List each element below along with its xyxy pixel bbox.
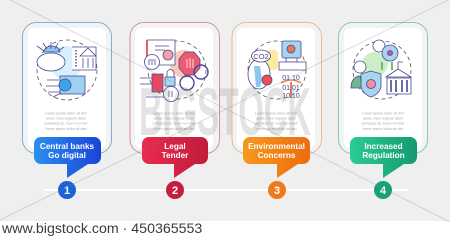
text: lorem ipsum: principes at. Cum no movi <box>153 122 195 126</box>
text: lorem ipsum: lorem ipsum dolor sit dim <box>154 127 194 131</box>
number badge 3 <box>268 181 286 199</box>
text: lorem ipsum: amet, mea regione diam <box>46 116 86 120</box>
label tab: legal tender: Tender <box>162 151 189 160</box>
panel: legal tender <box>130 22 220 199</box>
text: lorem ipsum: principes at. Cum no movi <box>255 122 297 126</box>
number badge 4 <box>374 181 392 199</box>
text: binary digits: 01 01 <box>282 85 300 92</box>
text: lorem ipsum <box>153 112 195 131</box>
text: lorem ipsum: Lorem ipsum dolor sit dim <box>362 112 404 116</box>
footer: source text: www.bigstock.com · 450365553 <box>2 220 202 236</box>
text: lorem ipsum: Lorem ipsum dolor sit dim <box>45 112 87 116</box>
number badge 3: 3 <box>274 185 280 197</box>
icon: piggy bank and digital money <box>37 40 97 100</box>
text: binary digits: 10 10 <box>282 93 300 100</box>
label tab: environmental concerns <box>243 137 310 178</box>
text: lorem ipsum <box>362 112 404 131</box>
number badge 1: 1 <box>64 185 70 197</box>
number badge 2 <box>166 181 184 199</box>
label tab: increased regulation: Regulation <box>362 151 405 160</box>
label tab: legal tender: Legal <box>164 142 186 151</box>
label tab: increased regulation <box>350 137 417 178</box>
number badge 4: 4 <box>380 185 387 197</box>
text: binary digits: 01 10 <box>282 75 300 82</box>
icon: legal document, stop hand, handcuffs <box>140 40 208 102</box>
label tab: central banks <box>34 137 101 178</box>
text: lorem ipsum: amet, mea regione diam <box>256 116 296 120</box>
text: lorem ipsum: lorem ipsum dolor sit dim <box>46 127 86 131</box>
text: lorem ipsum: Lorem ipsum dolor sit dim <box>255 112 297 116</box>
text: lorem ipsum: amet, mea regione diam <box>154 116 194 120</box>
text: lorem ipsum: principes at. Cum no movi <box>362 122 404 126</box>
label tab: central banks: Go digital <box>48 151 86 160</box>
label tab: central banks: Central banks <box>40 142 95 151</box>
text: lorem ipsum <box>255 112 297 131</box>
text: lorem ipsum: lorem ipsum dolor sit dim <box>256 127 296 131</box>
timeline <box>44 189 408 191</box>
label tab: legal tender <box>142 137 208 178</box>
icon: CO2 cloud, footprint, computer: CO2 <box>253 52 269 61</box>
text: lorem ipsum: principes at. Cum no movi <box>45 122 87 126</box>
label tab: environmental concerns: Concerns <box>258 151 296 160</box>
label tab: increased regulation: Increased <box>364 142 403 151</box>
text: lorem ipsum: amet, mea regione diam <box>363 116 403 120</box>
panel: environmental concerns <box>232 22 322 199</box>
text: lorem ipsum <box>45 112 87 131</box>
panel: central banks <box>22 22 112 199</box>
number badge 2: 2 <box>172 185 178 197</box>
icon: CO2 cloud, footprint, computer <box>248 41 306 99</box>
text: lorem ipsum: Lorem ipsum dolor sit dim <box>153 112 195 116</box>
number badge 1 <box>58 181 76 199</box>
text: binary digits <box>282 75 300 100</box>
text: lorem ipsum: lorem ipsum dolor sit dim <box>363 127 403 131</box>
panel: increased regulation <box>338 22 428 199</box>
icon: people, shield, government building <box>351 40 411 99</box>
label tab: environmental concerns: Environmental <box>248 142 305 151</box>
